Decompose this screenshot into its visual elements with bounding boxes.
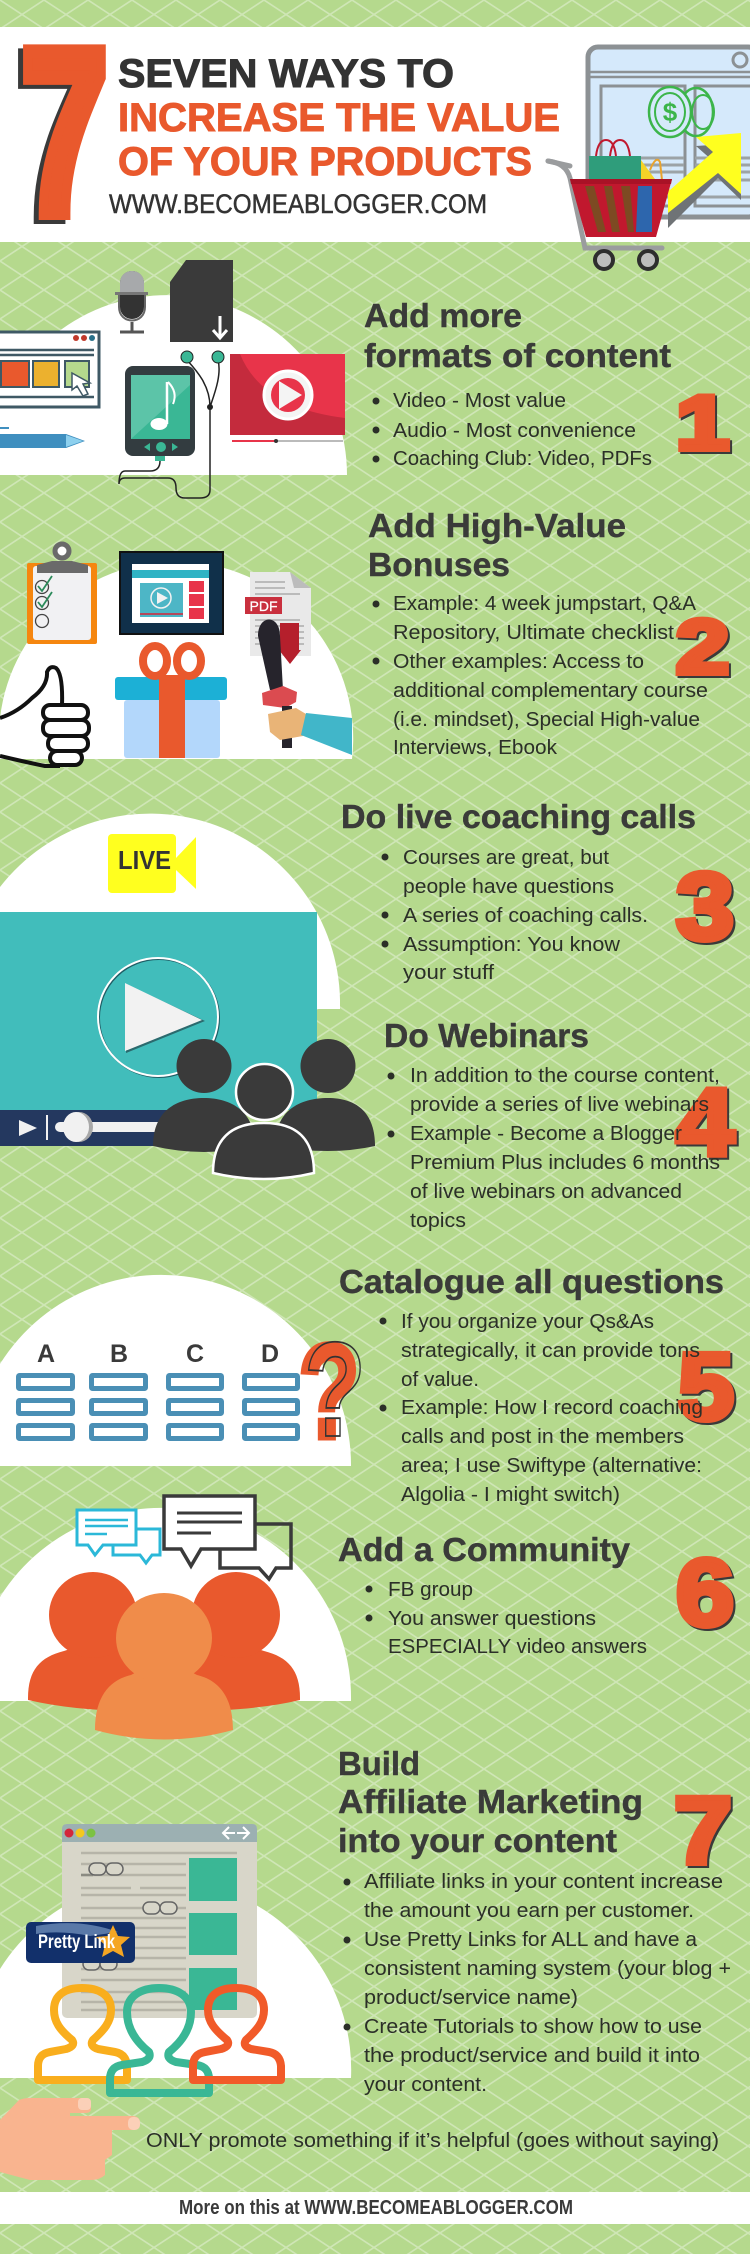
- step number 7: 7: [676, 1780, 734, 1886]
- heading: Affiliate Marketing: [338, 1783, 643, 1820]
- big numeral 7: 7: [21, 0, 108, 263]
- bullet list: You answer questions: [388, 1608, 596, 1630]
- icon: reporter microphone in hand: [258, 620, 352, 755]
- title: [118, 52, 560, 184]
- heading: Add High-Value: [368, 507, 626, 544]
- step number 7: 7: [674, 1778, 732, 1884]
- bullet list: your content.: [364, 2074, 487, 2096]
- step number 2: 2: [678, 607, 731, 692]
- badge: Pretty Link: Pretty Link: [38, 1932, 115, 1953]
- icon: webinar audience: [153, 1039, 375, 1179]
- icon: PDF document: PDF: [250, 598, 278, 614]
- bullet list: [372, 390, 652, 470]
- bullet list: consistent naming system (your blog +: [364, 1958, 731, 1980]
- column letters: D: [261, 1340, 279, 1368]
- bullet list: Example: How I record coaching: [401, 1397, 703, 1419]
- step number 6: 6: [678, 1542, 736, 1648]
- bullet list: ESPECIALLY video answers: [388, 1636, 647, 1658]
- bullet list: [372, 593, 708, 759]
- bullet list: Interviews, Ebook: [393, 737, 558, 759]
- heading: Add a Community: [338, 1531, 631, 1568]
- illustration: live video: [0, 814, 340, 1146]
- bullet list: the product/service and build it into: [364, 2045, 700, 2067]
- illustration: answer table: [0, 1275, 366, 1467]
- icon: gift box: [115, 646, 227, 758]
- illustration: community: [0, 1496, 351, 1740]
- step number 6: 6: [676, 1540, 734, 1646]
- icon: PDF document: [245, 572, 311, 664]
- heading: Do live coaching calls: [341, 798, 696, 835]
- step number 1: 1: [676, 381, 729, 466]
- illustration: content formats: [0, 260, 347, 498]
- header band: [0, 0, 750, 269]
- bullet list: A series of coaching calls.: [403, 905, 648, 927]
- icon: orange people: [28, 1572, 300, 1740]
- answer table cells: [18, 1376, 298, 1438]
- bullet list: In addition to the course content,: [410, 1065, 720, 1087]
- icon: microphone: [115, 271, 148, 332]
- bullet list: people have questions: [403, 876, 614, 898]
- bullet list: [344, 1871, 731, 2096]
- icon: checklist clipboard: [27, 544, 97, 644]
- step number 2: 2: [676, 605, 729, 690]
- bullet list: additional complementary course: [393, 680, 708, 702]
- bullet list: FB group: [388, 1579, 473, 1601]
- step number 4: 4: [676, 1070, 734, 1176]
- heading: into your content: [338, 1822, 617, 1859]
- bullet list: Coaching Club: Video, PDFs: [393, 448, 652, 470]
- bullet list: [380, 1311, 703, 1506]
- icon: pointing hand: [0, 2098, 140, 2180]
- bullet list: calls and post in the members: [401, 1426, 684, 1448]
- heading: [364, 297, 671, 374]
- footer band: More on this at WWW.BECOMEABLOGGER.COM: [179, 2197, 573, 2219]
- icon: LIVE camera badge: [108, 834, 196, 893]
- bullet list: your stuff: [403, 962, 494, 984]
- bullet list: area; I use Swiftype (alternative:: [401, 1455, 702, 1477]
- panel: step 5 catalogue questions: [0, 1263, 736, 1506]
- bullet list: Affiliate links in your content increase: [364, 1871, 723, 1893]
- column letters: C: [186, 1340, 204, 1368]
- bullet list: Example - Become a Blogger: [410, 1123, 682, 1145]
- bullet list: [366, 1579, 647, 1658]
- step number 5: 5: [678, 1334, 734, 1440]
- icon: LIVE camera badge: LIVE: [118, 845, 171, 875]
- website address: WWW.BECOMEABLOGGER.COM: [109, 189, 487, 219]
- heading: Catalogue all questions: [339, 1263, 724, 1300]
- panel: step 1 add more formats: [0, 260, 731, 498]
- heading: formats of content: [364, 337, 671, 374]
- icon: outline people: [38, 1988, 281, 2093]
- panel: step 3 live coaching calls: [0, 798, 736, 1146]
- icon: browser with shopping cart and growth arrow: [548, 47, 750, 269]
- bullet list: [382, 847, 648, 984]
- callout: promotion note: ONLY promote something if it’s helpful (goes without saying): [146, 2130, 719, 2152]
- icon: download file: [170, 260, 233, 342]
- icon: chat bubbles: [77, 1496, 291, 1579]
- panel: step 7 affiliate marketing: [0, 1745, 734, 2096]
- bullet list: [388, 1065, 720, 1232]
- bullet list: Create Tutorials to show how to use: [364, 2016, 702, 2038]
- bullet list: product/service name): [364, 1987, 578, 2009]
- step number 3: 3: [676, 854, 734, 960]
- icon: tablet with video lesson: [120, 552, 223, 634]
- bullet list: Repository, Ultimate checklist: [393, 622, 674, 644]
- heading: Add more: [364, 297, 522, 334]
- panel: step 2 high-value bonuses: [0, 507, 731, 766]
- big numeral 7: [16, 0, 108, 267]
- panel: step 6 community: [0, 1496, 736, 1740]
- icon: video player: [230, 354, 345, 443]
- bullet list: Premium Plus includes 6 months: [410, 1152, 720, 1174]
- step number 3: 3: [678, 856, 736, 962]
- bullet list: Courses are great, but: [403, 847, 609, 869]
- bullet list: of value.: [401, 1369, 479, 1391]
- icon: browser with shopping cart and growth arrow: $: [663, 97, 678, 127]
- bullet list: Use Pretty Links for ALL and have a: [364, 1929, 698, 1951]
- heading: [338, 1745, 643, 1859]
- heading: Build: [338, 1745, 420, 1782]
- bullet list: of live webinars on advanced: [410, 1181, 682, 1203]
- big numeral 7: 7: [16, 4, 103, 267]
- icon: thumbs up: [0, 667, 89, 766]
- heading: [368, 507, 626, 583]
- bullet list: Video - Most value: [393, 390, 566, 412]
- title: OF YOUR PRODUCTS: [118, 140, 532, 184]
- bullet list: strategically, it can provide tons: [401, 1340, 700, 1362]
- footer band: [0, 2192, 750, 2224]
- title: INCREASE THE VALUE: [118, 96, 560, 140]
- bullet list: the amount you earn per customer.: [364, 1900, 694, 1922]
- bullet list: Algolia - I might switch): [401, 1484, 620, 1506]
- illustration: bonuses: [0, 544, 353, 766]
- heading: Bonuses: [368, 546, 510, 583]
- bullet list: Assumption: You know: [403, 934, 621, 956]
- illustration: affiliate links: [0, 1824, 351, 2093]
- step number 5: 5: [680, 1336, 736, 1442]
- column letters: B: [110, 1340, 128, 1368]
- bullet list: provide a series of live webinars: [410, 1094, 709, 1116]
- bullet list: Example: 4 week jumpstart, Q&A: [393, 593, 697, 615]
- icon: browser with links: [62, 1824, 257, 2018]
- step number 1: 1: [678, 383, 731, 468]
- bullet list: If you organize your Qs&As: [401, 1311, 654, 1333]
- bullet list: topics: [410, 1210, 466, 1232]
- icon: pencil: [0, 427, 85, 448]
- icon: question mark: ?: [298, 1316, 360, 1467]
- column letters: [37, 1340, 279, 1368]
- title: SEVEN WAYS TO: [118, 52, 454, 96]
- column letters: A: [37, 1340, 55, 1368]
- icon: question mark: ?: [304, 1314, 366, 1465]
- step number 4: 4: [678, 1072, 736, 1178]
- heading: Do Webinars: [384, 1017, 589, 1054]
- bullet list: Audio - Most convenience: [393, 420, 636, 442]
- bullet list: (i.e. mindset), Special High-value: [393, 709, 700, 731]
- badge: Pretty Link: [26, 1922, 135, 1963]
- icon: web page with coloured tiles: [0, 332, 99, 407]
- video player screen: [0, 912, 317, 1146]
- bullet list: Other examples: Access to: [393, 651, 644, 673]
- panel: step 4 webinars: [153, 1017, 736, 1232]
- icon: music player with earphones: [119, 351, 224, 498]
